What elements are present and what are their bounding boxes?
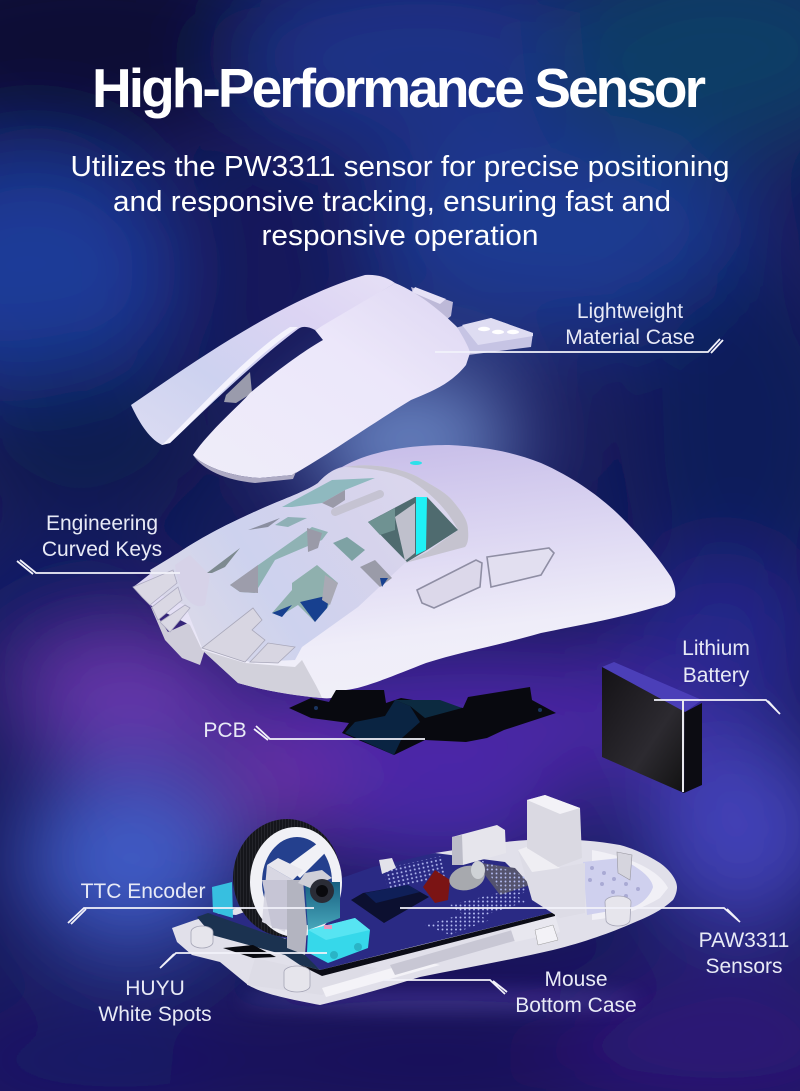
PCB part xyxy=(289,687,556,755)
label: Mouse Bottom Case xyxy=(384,968,637,1017)
PCB board xyxy=(197,853,555,970)
scroll wheel xyxy=(233,819,342,937)
label: Mouse Bottom Case: Bottom Case xyxy=(515,994,637,1017)
label: Engineering Curved Keys xyxy=(17,512,180,574)
label: Engineering Curved Keys: Curved Keys xyxy=(42,538,162,561)
outer shell xyxy=(133,445,675,698)
lithium battery xyxy=(602,662,702,793)
left panel xyxy=(131,275,395,445)
main mouse body: engineering curved keys xyxy=(133,445,675,698)
rear tabs xyxy=(411,287,533,356)
sensor chip xyxy=(351,885,429,923)
subtitle text: responsive operation xyxy=(262,220,538,252)
label: HUYU White Spots: White Spots xyxy=(98,1003,212,1026)
title: High-Performance Sensor xyxy=(92,57,706,119)
case posts xyxy=(191,896,631,992)
red component and lens xyxy=(423,870,450,903)
inner supports xyxy=(224,372,252,403)
label: Mouse Bottom Case: Mouse xyxy=(544,968,608,991)
subtitle text: and responsive tracking, ensuring fast and xyxy=(113,186,671,218)
skeleton top surface xyxy=(150,465,468,662)
label: Lithium Battery xyxy=(654,637,780,792)
window with cyan light xyxy=(368,497,458,562)
upper cutouts xyxy=(282,478,375,507)
label: PCB xyxy=(203,719,425,742)
subtitle text xyxy=(70,151,730,252)
label: PAW3311 Sensors: PAW3311 xyxy=(699,929,789,952)
label: TTC Encoder xyxy=(68,880,314,924)
cutouts xyxy=(248,518,280,530)
label: TTC Encoder: TTC Encoder xyxy=(81,880,205,903)
upper tab xyxy=(617,852,632,880)
front lower face xyxy=(202,650,322,698)
white connector blocks xyxy=(452,825,506,865)
label: Lightweight Material Case: Lightweight xyxy=(577,300,683,323)
right panel xyxy=(193,283,470,478)
mouse bottom assembly xyxy=(172,795,677,1012)
label: Engineering Curved Keys: Engineering xyxy=(46,512,158,535)
nose fins left lobe xyxy=(133,570,190,632)
nose fins right lobe xyxy=(202,608,295,663)
small front details xyxy=(247,958,378,995)
label: PAW3311 Sensors: Sensors xyxy=(705,955,783,978)
label: HUYU White Spots xyxy=(98,953,327,1026)
label: HUYU White Spots: HUYU xyxy=(125,977,185,1000)
subtitle text: Utilizes the PW3311 sensor for precise positioning xyxy=(70,151,730,183)
label: Lithium Battery: Battery xyxy=(683,664,750,687)
cavity rim xyxy=(345,465,468,563)
cyan switches xyxy=(212,882,370,963)
encoder bracket xyxy=(287,870,340,955)
bottom case xyxy=(172,839,677,1005)
label: Lightweight Material Case: Material Case xyxy=(565,326,695,349)
side buttons xyxy=(417,548,554,608)
label: Lightweight Material Case xyxy=(435,300,723,353)
lower left lobe face xyxy=(150,605,208,665)
top shell: lightweight material case xyxy=(131,275,533,483)
label: PCB: PCB xyxy=(203,719,247,742)
case floor xyxy=(583,858,653,915)
label: PAW3311 Sensors xyxy=(400,908,789,978)
label: Lithium Battery: Lithium xyxy=(682,637,750,660)
reflection under case xyxy=(240,988,640,1012)
